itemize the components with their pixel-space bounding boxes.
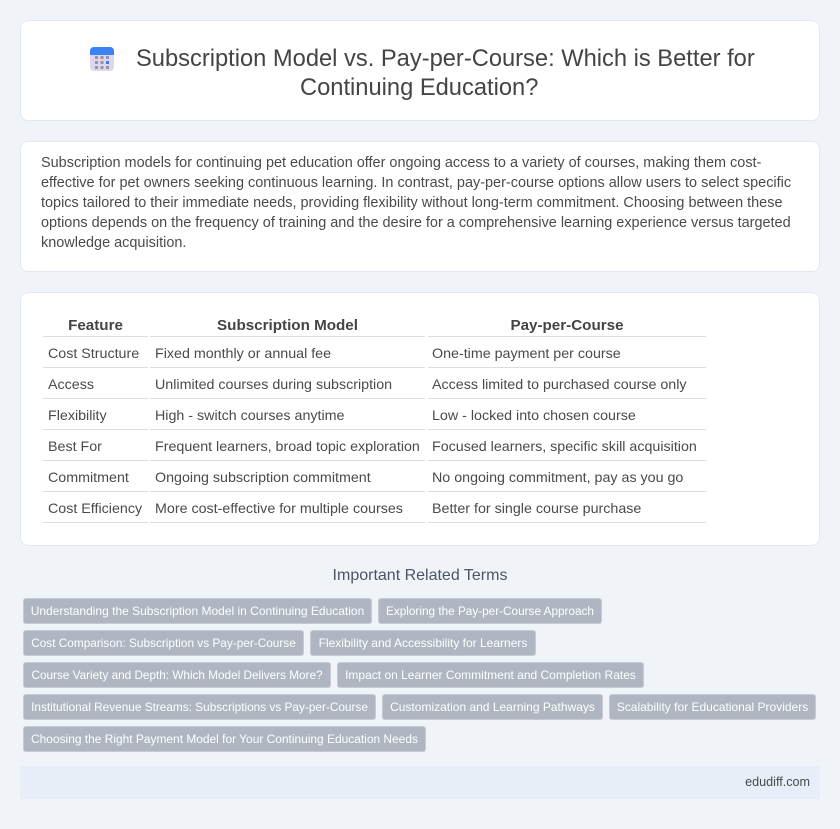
cell: Unlimited courses during subscription (155, 377, 392, 393)
title: Continuing Education? (300, 75, 538, 101)
row: access: Access (48, 377, 94, 393)
tag (23, 726, 426, 752)
tag (378, 598, 602, 624)
tag: Cost Comparison: Subscription vs Pay-per-Course (31, 636, 296, 650)
related terms tags (23, 598, 816, 752)
tag (382, 694, 603, 720)
table header: subscription model: Subscription Model (217, 317, 358, 334)
tag: Flexibility and Accessibility for Learners (319, 636, 527, 650)
row: cost structure: Cost Structure (48, 346, 139, 362)
footer brand: edudiff.com (745, 775, 810, 789)
cell: Fixed monthly or annual fee (155, 346, 331, 362)
intro paragraph: Subscription models for continuing pet education offer ongoing access to a variety of courses, making them cost- (41, 155, 761, 171)
title: Subscription Model vs. Pay-per-Course: Which is Better for (136, 46, 755, 72)
tag (23, 694, 376, 720)
tag: Course Variety and Depth: Which Model Delivers More? (31, 669, 323, 682)
cell: No ongoing commitment, pay as you go (432, 470, 683, 486)
tag: Understanding the Subscription Model in Continuing Education (31, 604, 364, 618)
title (136, 46, 755, 101)
tag: Choosing the Right Payment Model for Your Continuing Education Needs (31, 732, 418, 746)
tag (609, 694, 816, 720)
footer bar (20, 766, 820, 799)
intro paragraph (41, 155, 791, 251)
cell: One-time payment per course (432, 346, 621, 362)
tag (23, 598, 372, 624)
cell: Focused learners, specific skill acquisition (432, 439, 697, 455)
icon: calendar (90, 47, 114, 71)
tag (23, 662, 331, 688)
cell: More cost-effective for multiple courses (155, 501, 403, 517)
row: cost efficiency: Cost Efficiency (48, 501, 142, 517)
intro paragraph: options depends on the frequency of training and the desire for a comprehensive learning experience versus targeted (41, 215, 791, 231)
table header: pay-per-course: Pay-per-Course (510, 317, 624, 334)
cell: Frequent learners, broad topic exploration (155, 439, 420, 455)
intro text panel (20, 141, 820, 272)
intro paragraph: topics tailored to their immediate needs, providing flexibility without long-term commitment. Choosing between these (41, 195, 782, 211)
header panel (20, 20, 820, 121)
row: commitment: Commitment (48, 470, 129, 486)
row: best for: Best For (48, 439, 102, 455)
tag (23, 630, 304, 656)
cell: Low - locked into chosen course (432, 408, 636, 424)
intro paragraph: knowledge acquisition. (41, 235, 186, 251)
comparison table panel (20, 292, 820, 546)
tag (337, 662, 644, 688)
related terms heading: Important Related Terms (333, 567, 507, 584)
cell: Access limited to purchased course only (432, 377, 687, 393)
tag: Scalability for Educational Providers (617, 700, 808, 714)
tag: Impact on Learner Commitment and Completion Rates (345, 668, 636, 682)
table header: feature: Feature (68, 317, 123, 334)
row: flexibility: Flexibility (48, 408, 107, 424)
tag: Customization and Learning Pathways (390, 700, 595, 714)
intro paragraph: effective for pet owners seeking continuous learning. In contrast, pay-per-course options allow users to select specific (41, 175, 791, 191)
cell: Ongoing subscription commitment (155, 470, 371, 486)
tag (310, 630, 536, 656)
cell: High - switch courses anytime (155, 408, 344, 424)
tag: Institutional Revenue Streams: Subscriptions vs Pay-per-Course (31, 700, 368, 714)
cell: Better for single course purchase (432, 501, 641, 517)
tag: Exploring the Pay-per-Course Approach (386, 605, 594, 618)
